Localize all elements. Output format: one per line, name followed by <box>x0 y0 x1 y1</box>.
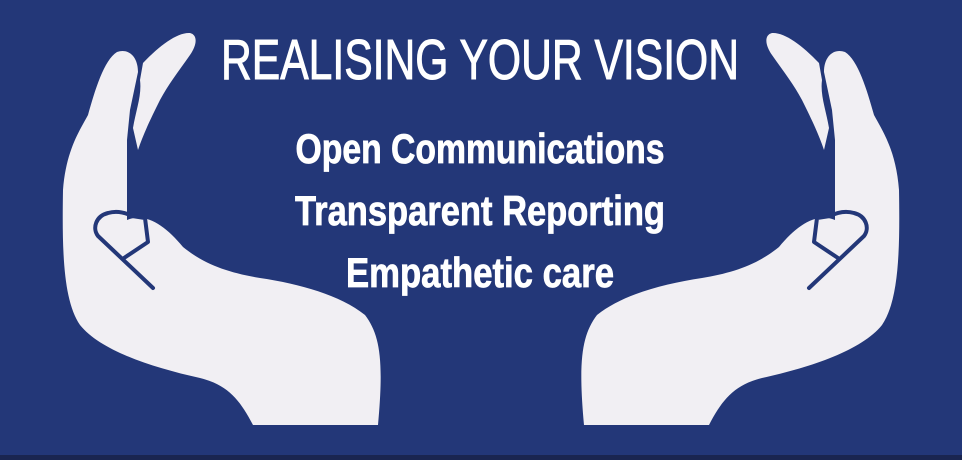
icon: right hand <box>581 33 899 425</box>
text: values list <box>295 125 665 296</box>
thumb outline <box>95 212 153 288</box>
line 2: Transparent Reporting <box>295 187 665 234</box>
line 3: Empathetic care <box>346 249 614 296</box>
icon: left hand <box>63 33 381 425</box>
line 1: Open Communications <box>296 125 664 172</box>
title: REALISING YOUR VISION <box>221 28 739 92</box>
